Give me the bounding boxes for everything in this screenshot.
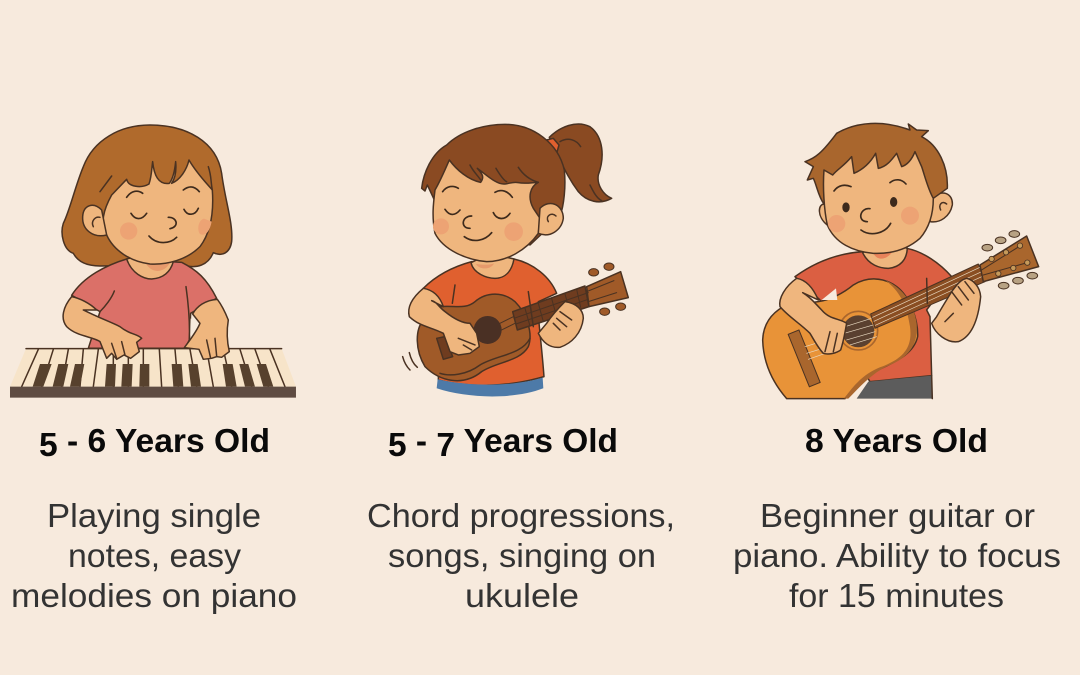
illustration: girl playing ukulele [403, 124, 628, 396]
pants [857, 376, 932, 399]
shirt [423, 259, 557, 385]
column 3 description: Beginner guitar or [760, 497, 1035, 534]
ear [538, 204, 563, 235]
column 2 description [367, 497, 675, 614]
column 2 heading: Years Old [455, 422, 618, 459]
column 1 heading: - 6 Years Old [58, 422, 270, 459]
eyes, nose, smile [127, 187, 199, 243]
jeans [437, 378, 543, 396]
arms and hands [780, 278, 847, 354]
column 3 description: piano. Ability to focus [733, 537, 1061, 574]
ears [819, 193, 952, 225]
face [433, 160, 540, 262]
column 1 description: Playing single [47, 497, 261, 534]
neck [863, 242, 907, 268]
piano keyboard [10, 349, 296, 398]
hair [62, 125, 232, 267]
hair [422, 124, 565, 245]
column 1 description [11, 497, 297, 614]
column 1 description: notes, easy [68, 537, 242, 574]
eyes, nose, smile [834, 180, 906, 234]
face [103, 160, 213, 264]
column 2 description: ukulele [465, 577, 579, 614]
ukulele [417, 263, 628, 381]
column 3 description [733, 497, 1061, 614]
column 2 heading: - [407, 422, 436, 459]
ear [83, 205, 107, 236]
illustration: girl playing piano [10, 125, 296, 398]
column 1 description: melodies on piano [11, 577, 297, 614]
shirt [72, 259, 217, 348]
column 3 heading: 8 Years Old [805, 422, 988, 459]
shirt [795, 248, 952, 382]
ponytail [549, 124, 612, 202]
column 2 description: songs, singing on [388, 537, 656, 574]
column 2 heading: 5 [388, 426, 407, 463]
face [823, 152, 933, 253]
neck [127, 253, 173, 279]
neck [471, 253, 514, 278]
hair [805, 123, 947, 210]
column 3 description: for 15 minutes [789, 577, 1004, 614]
arms and hands [63, 297, 142, 359]
column 1 heading: 5 [39, 426, 58, 463]
eyes, nose, smile [443, 186, 512, 240]
illustration: boy playing guitar [763, 123, 1039, 399]
guitar [763, 231, 1039, 399]
column 2 description: Chord progressions, [367, 497, 675, 534]
bridge and arms [437, 337, 453, 359]
column 2 heading: 7 [436, 426, 455, 463]
